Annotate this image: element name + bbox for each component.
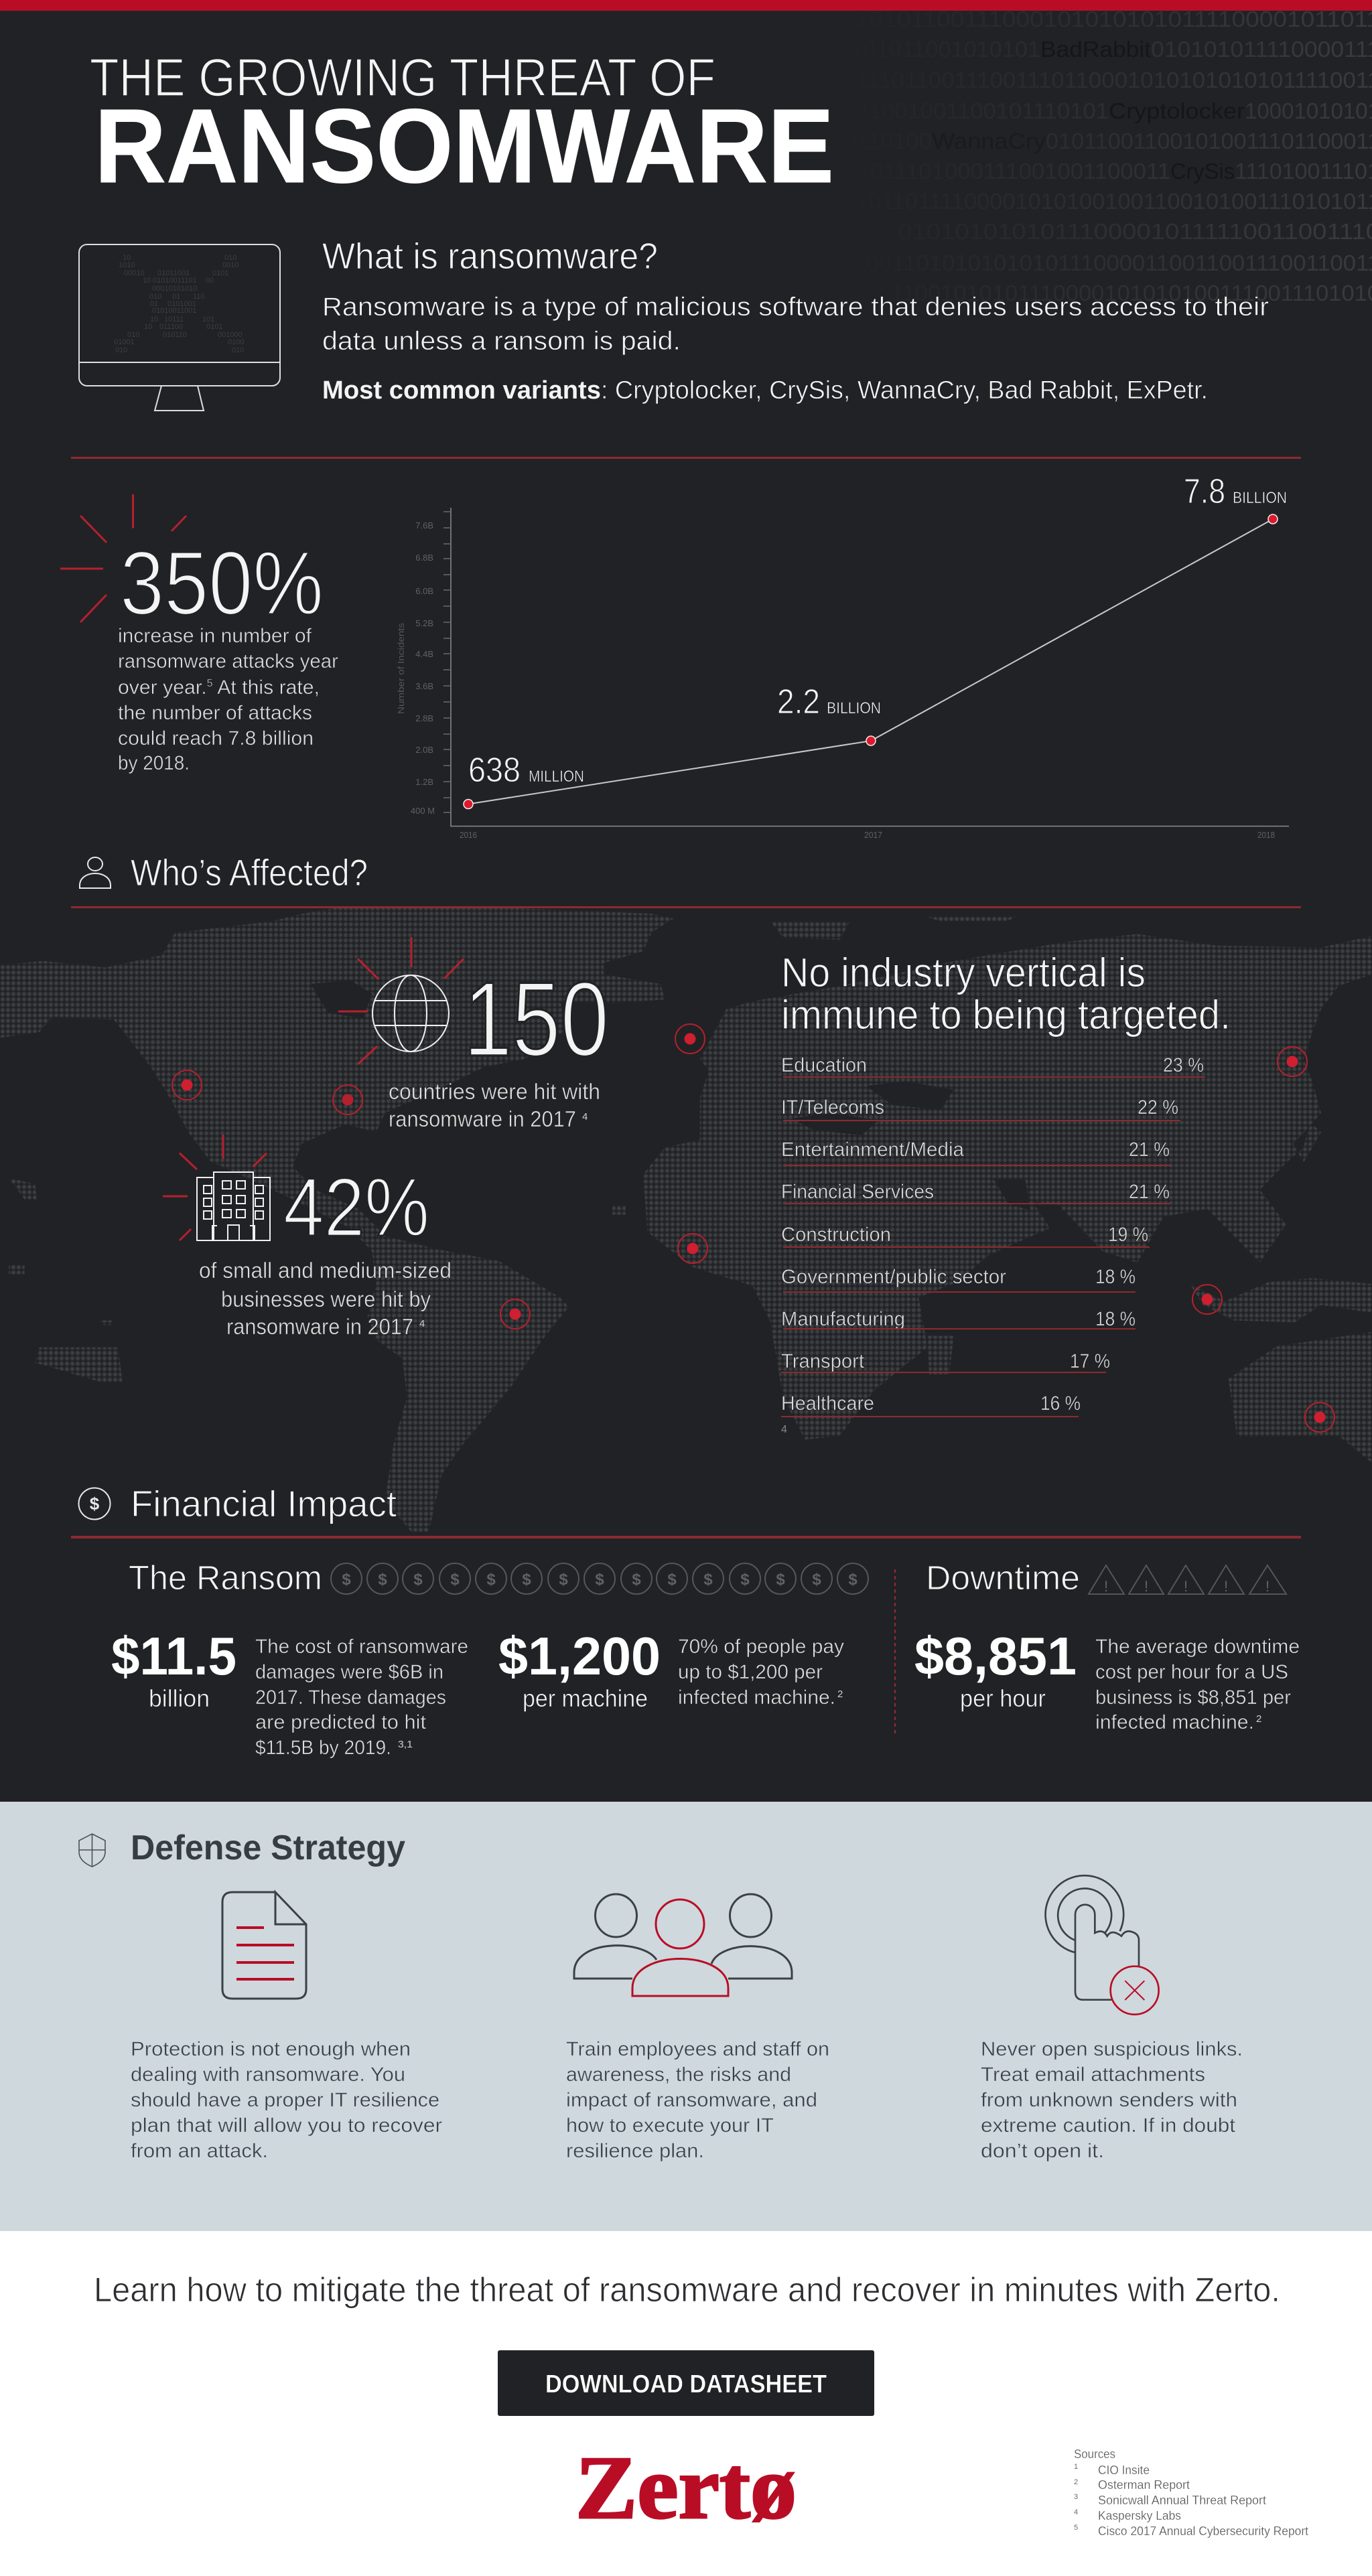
text: defense column three: don’t open it. (981, 2140, 1104, 2162)
stat: 350% increase with burst rays: over year. (118, 676, 206, 699)
title: THE GROWING THREAT OF (90, 48, 715, 107)
sources list: Cisco 2017 Annual Cybersecurity Report (1098, 2524, 1308, 2538)
icon: monitor with binary skull: 110 (193, 293, 205, 301)
icon: monitor with binary skull: 01 (172, 293, 180, 301)
industry percentage list (781, 1054, 1205, 1435)
stat: 42% businesses with building icon (163, 1135, 452, 1339)
binary code backdrop with ransomware variant names: 111001101101111000010101001001100101001110101011 (784, 189, 1372, 214)
line chart: number of incidents: 3.6B (415, 681, 433, 691)
stat: $1,200 per machine: 70% of people pay (678, 1636, 844, 1658)
line chart: number of incidents: 7.8 (1184, 472, 1225, 511)
industry percentage list: Healthcare (781, 1392, 874, 1415)
industry percentage list: Transport (781, 1350, 865, 1372)
intro text block: Most common variants (322, 376, 601, 405)
heading: financial impact: $ (90, 1494, 100, 1514)
dotted world map (0, 898, 1372, 1541)
icon: hand clicking link with red cross (1046, 1875, 1159, 2015)
subheading: downtime: Downtime (926, 1559, 1080, 1597)
icons: row of dollar coins: $ (559, 1571, 568, 1589)
intro text block: What is ransomware? (322, 235, 658, 277)
icons: row of dollar coins: $ (632, 1571, 641, 1589)
icons: row of warning triangles: ! (1265, 1578, 1270, 1595)
stat: 42% businesses with building icon: 4 (419, 1318, 425, 1330)
icon: document (222, 1892, 306, 1999)
stat: $1,200 per machine (498, 1626, 844, 1712)
stat: 150 countries with globe icon: 4 (582, 1111, 588, 1123)
industry percentage list: 23 % (1163, 1054, 1204, 1076)
industry percentage list: 4 (781, 1424, 787, 1435)
binary code backdrop with ransomware variant names: 010110011001010011101100011 (1046, 129, 1372, 153)
icons: row of dollar coins: $ (667, 1571, 677, 1589)
icon: monitor with binary skull: 10 (150, 315, 158, 324)
sources list: Sources (1074, 2447, 1115, 2461)
stat: $8,851 per hour: per hour (960, 1685, 1046, 1712)
sources list: 2 (1074, 2478, 1078, 2486)
stat: 150 countries with globe icon (338, 937, 609, 1131)
stat: $8,851 per hour (914, 1626, 1300, 1733)
industry percentage list: IT/Telecoms (781, 1096, 884, 1119)
icons: row of warning triangles: ! (1144, 1578, 1148, 1595)
binary code backdrop with ransomware variant names: BadRabbit (1040, 37, 1151, 62)
stat: $8,851 per hour: The average downtime (1095, 1636, 1300, 1658)
icon: monitor with binary skull: 0010 (222, 261, 238, 269)
line chart: number of incidents: BILLION (827, 699, 881, 717)
icons: row of dollar coins: $ (413, 1571, 423, 1589)
intro text block: Ransomware is a type of malicious software that denies users access to their (322, 293, 1269, 321)
industry percentage list: 16 % (1040, 1392, 1081, 1415)
sources list: 5 (1074, 2524, 1078, 2532)
line chart: number of incidents: MILLION (529, 768, 584, 786)
text: defense column two: how to execute your IT (566, 2115, 774, 2137)
industry percentage list: Government/public sector (781, 1266, 1006, 1288)
stat: 150 countries with globe icon: 150 (464, 960, 609, 1078)
sources list: 4 (1074, 2508, 1078, 2516)
industry percentage list: 21 % (1129, 1181, 1170, 1203)
binary code backdrop with ransomware variant names: Cryptolocker (1109, 98, 1245, 123)
icon: monitor with binary skull: 10 (123, 254, 131, 262)
line chart: number of incidents: 2.0B (415, 745, 433, 755)
icon: monitor with binary skull: 00010101010 (152, 285, 197, 293)
text: defense column two: impact of ransomware, and (566, 2089, 817, 2111)
binary code backdrop with ransomware variant names: 01010101010111000010111110011001110 (898, 219, 1372, 244)
button: download datasheet (498, 2350, 874, 2416)
binary code backdrop with ransomware variant names: 1110101011001110001010101010111100001011011 (804, 7, 1372, 31)
text: defense column one: from an attack. (131, 2140, 268, 2162)
line chart: number of incidents: Number of Incidents (396, 622, 406, 714)
stat: $11.5 billion: are predicted to hit (255, 1711, 427, 1733)
stat: $11.5 billion (111, 1626, 468, 1759)
heading: no industry vertical: No industry vertical is (781, 950, 1146, 995)
sources list: Kaspersky Labs (1098, 2509, 1181, 2522)
stat: $11.5 billion: 2017. These damages (255, 1687, 446, 1709)
icon: monitor with binary skull: 010 (115, 346, 127, 354)
industry percentage list: 19 % (1108, 1224, 1148, 1246)
stat: $11.5 billion: billion (149, 1685, 210, 1712)
text: defense column one: should have a proper IT resilience (131, 2089, 439, 2111)
stat: $11.5 billion: damages were $6B in (255, 1661, 443, 1683)
stat: $1,200 per machine: per machine (523, 1685, 648, 1712)
icon: monitor with binary skull: 010 (149, 293, 161, 301)
intro text block: data unless a ransom is paid. (322, 327, 681, 356)
logo: Zerto: Zertø (575, 2438, 797, 2537)
icons: row of dollar coins (331, 1563, 868, 1594)
panel: defense strategy (0, 1802, 1372, 2231)
stat: $1,200 per machine: $1,200 (498, 1626, 661, 1686)
heading: who's affected: Who’s Affected? (131, 851, 368, 893)
heading: financial impact: Financial Impact (131, 1483, 397, 1524)
icon: monitor with binary skull: 010110 (163, 331, 187, 339)
line chart: number of incidents: BILLION (1233, 489, 1287, 507)
text: defense column one: dealing with ransomware. You (131, 2064, 405, 2086)
icon: monitor with binary skull: 01010011101 (153, 277, 197, 285)
sources list: CIO Insite (1098, 2463, 1150, 2477)
icons: row of warning triangles: ! (1104, 1578, 1108, 1595)
industry percentage list: 17 % (1070, 1350, 1110, 1372)
text: defense column three (981, 2038, 1243, 2162)
title: RANSOMWARE (94, 88, 834, 205)
industry percentage list: 21 % (1129, 1139, 1170, 1161)
icon: monitor with binary skull (79, 244, 280, 411)
text: defense column two: resilience plan. (566, 2140, 704, 2162)
line chart: number of incidents: 400 M (411, 806, 435, 816)
icon: monitor with binary skull: 0100 (228, 338, 244, 346)
intro text block: : Cryptolocker, CrySis, WannaCry, Bad Rabbit, ExPetr. (601, 376, 1208, 405)
icons: row of dollar coins: $ (342, 1571, 351, 1589)
binary code backdrop with ransomware variant names: 010101011110000111 (1151, 37, 1372, 62)
stat: $1,200 per machine: up to $1,200 per (678, 1661, 823, 1683)
text: defense column three: Treat email attachments (981, 2064, 1205, 2086)
icon: monitor with binary skull: 0101 (206, 323, 222, 331)
stat: $11.5 billion: $11.5B by 2019. (255, 1737, 391, 1759)
stat: $8,851 per hour: 2 (1256, 1713, 1261, 1725)
stat: $11.5 billion: The cost of ransomware (255, 1636, 468, 1658)
sources list: 3 (1074, 2493, 1078, 2501)
subheading: the ransom: The Ransom (129, 1559, 322, 1597)
icons: row of dollar coins: $ (378, 1571, 387, 1589)
stat: 350% increase with burst rays: ransomware attacks year (118, 650, 338, 672)
line chart: number of incidents: 2017 (864, 830, 882, 840)
icon: monitor with binary skull: 01001 (114, 338, 135, 346)
sources list: Osterman Report (1098, 2478, 1190, 2492)
heading: defense strategy: Defense Strategy (131, 1829, 405, 1867)
sources list: Sonicwall Annual Threat Report (1098, 2494, 1266, 2507)
stat: $8,851 per hour: infected machine. (1095, 1711, 1254, 1733)
icons: row of warning triangles: ! (1224, 1578, 1228, 1595)
binary code backdrop with ransomware variant names: 0100111011001110011101100010101010101011110011 (804, 68, 1372, 92)
icon: monitor with binary skull: 10111 (164, 315, 184, 324)
stat: 42% businesses with building icon: businesses were hit by (221, 1287, 431, 1311)
line chart: number of incidents: 2018 (1257, 830, 1275, 840)
icon: monitor with binary skull: 0101 (212, 269, 228, 277)
line chart: number of incidents (396, 472, 1289, 840)
icons: row of dollar coins: $ (522, 1571, 531, 1589)
icons: row of dollar coins: $ (450, 1571, 460, 1589)
text: defense column two: Train employees and staff on (566, 2038, 829, 2060)
binary code backdrop with ransomware variant names: 110101011001010101 (814, 37, 1040, 62)
binary code backdrop with ransomware variant names: 11001001100101110101 (858, 98, 1109, 123)
binary code backdrop with ransomware variant names: 10110100110101010101011100001100110011100110011 (791, 251, 1372, 275)
stat: $8,851 per hour: $8,851 (914, 1626, 1077, 1686)
binary code backdrop with ransomware variant names: 1011101000111001001100011 (858, 159, 1170, 184)
stat: $1,200 per machine: infected machine. (678, 1687, 835, 1709)
stat: $11.5 billion: $11.5 (111, 1626, 236, 1686)
sources list: 1 (1074, 2463, 1078, 2471)
stat: 42% businesses with building icon: 42% (283, 1162, 429, 1254)
line chart: number of incidents: 2016 (460, 830, 477, 840)
industry percentage list: Financial Services (781, 1181, 934, 1203)
top red bar (0, 0, 1372, 11)
icons: row of warning triangles: ! (1184, 1578, 1188, 1595)
stat: 350% increase with burst rays: 350% (120, 532, 324, 634)
industry percentage list: Education (781, 1054, 867, 1076)
icon: monitor with binary skull: 011100 (159, 323, 183, 331)
panel: white footer (0, 2231, 1372, 2576)
text: defense column two (566, 2038, 829, 2162)
icons: row of dollar coins: $ (703, 1571, 713, 1589)
line chart: number of incidents: 5.2B (415, 618, 433, 628)
text: defense column three: from unknown senders with (981, 2089, 1237, 2111)
icon: monitor with binary skull: 101 (202, 315, 214, 324)
industry percentage list: Manufacturing (781, 1308, 905, 1330)
line chart: number of incidents: 638 (468, 751, 521, 790)
stat: 350% increase with burst rays: by 2018. (118, 752, 190, 774)
industry percentage list: Construction (781, 1224, 891, 1246)
icon: monitor with binary skull: 10 (143, 277, 151, 285)
industry percentage list: 18 % (1095, 1308, 1136, 1330)
industry percentage list: 18 % (1095, 1266, 1136, 1288)
stat: $8,851 per hour: business is $8,851 per (1095, 1687, 1291, 1709)
stat: 150 countries with globe icon: ransomware in 2017 (389, 1106, 576, 1131)
button: download datasheet: DOWNLOAD DATASHEET (545, 2370, 827, 2399)
stat: 42% businesses with building icon: ransomware in 2017 (226, 1314, 413, 1339)
text: defense column three: extreme caution. If in doubt (981, 2115, 1236, 2137)
industry percentage list: 22 % (1138, 1096, 1178, 1119)
text: defense column one: Protection is not enough when (131, 2038, 411, 2060)
heading: no industry vertical (781, 950, 1231, 1037)
stat: 350% increase with burst rays: At this rate, (213, 676, 320, 699)
stat: 350% increase with burst rays: increase in number of (118, 625, 312, 647)
icon: monitor with binary skull: 00 (206, 277, 214, 285)
icons: row of dollar coins: $ (812, 1571, 821, 1589)
icon: three people (574, 1894, 792, 1996)
icon: monitor with binary skull: 010 (224, 254, 236, 262)
icons: row of warning triangles (1089, 1565, 1286, 1595)
line chart: number of incidents: 2.2 (777, 683, 820, 721)
icon: monitor with binary skull: 010 (232, 346, 244, 354)
call to action text: Learn how to mitigate the threat of ransomware and recover in minutes with Zerto. (94, 2271, 1280, 2309)
stat: $8,851 per hour: cost per hour for a US (1095, 1661, 1288, 1683)
binary code backdrop with ransomware variant names: 110010101011100001010101001110011101010 (891, 281, 1372, 305)
stat: 350% increase with burst rays: the number of attacks (118, 702, 312, 724)
heading: no industry vertical: immune to being targeted. (781, 992, 1231, 1037)
icon: monitor with binary skull: 1010 (119, 261, 135, 269)
icon: monitor with binary skull: 0101001 (167, 300, 196, 308)
icon: monitor with binary skull: 00010 (124, 269, 145, 277)
icon: monitor with binary skull: 01 (150, 300, 158, 308)
industry percentage list: Entertainment/Media (781, 1139, 964, 1161)
stat: $1,200 per machine: 2 (837, 1689, 843, 1700)
stat: 150 countries with globe icon: countries were hit with (389, 1079, 600, 1104)
icon: monitor with binary skull: 01010011001 (152, 307, 196, 315)
icon: monitor with binary skull: 001000 (218, 331, 243, 339)
text: defense column two: awareness, the risks and (566, 2064, 791, 2086)
stat: 350% increase with burst rays: 5 (207, 678, 213, 689)
text: defense column three: Never open suspicious links. (981, 2038, 1243, 2060)
dark background panel (0, 0, 1372, 1802)
line chart: number of incidents: 1.2B (415, 777, 433, 787)
icon: monitor with binary skull: 01011001 (157, 269, 190, 277)
sources list (1074, 2447, 1308, 2538)
intro text block (322, 235, 1269, 405)
binary code backdrop with ransomware variant names: WannaCry (932, 129, 1046, 153)
icon: monitor with binary skull: 010 (127, 331, 139, 339)
binary code backdrop with ransomware variant names: 111010011101 (1235, 159, 1372, 184)
line chart: number of incidents: 6.0B (415, 586, 433, 596)
icon: monitor with binary skull: 10 (144, 323, 152, 331)
icons: row of dollar coins: $ (848, 1571, 858, 1589)
line chart: number of incidents: 6.8B (415, 553, 433, 563)
text: defense column one (131, 2038, 442, 2162)
icons: row of dollar coins: $ (740, 1571, 750, 1589)
line chart: number of incidents: 2.8B (415, 713, 433, 723)
line chart: number of incidents: 4.4B (415, 649, 433, 659)
stat: $11.5 billion: 3,1 (398, 1739, 413, 1750)
icons: row of dollar coins: $ (486, 1571, 496, 1589)
binary code backdrop with ransomware variant names (784, 7, 1372, 305)
stat: 42% businesses with building icon: of small and medium-sized (199, 1258, 452, 1283)
icons: row of dollar coins: $ (595, 1571, 604, 1589)
binary code backdrop with ransomware variant names: 10110100 (831, 129, 932, 153)
binary code backdrop with ransomware variant names: CrySis (1170, 159, 1235, 184)
icons: row of dollar coins: $ (776, 1571, 785, 1589)
stat: 350% increase with burst rays (60, 494, 338, 774)
map markers (172, 1024, 1334, 1432)
line chart: number of incidents: 7.6B (415, 520, 433, 530)
stat: 350% increase with burst rays: could reach 7.8 billion (118, 727, 314, 749)
text: defense column one: plan that will allow you to recover (131, 2115, 442, 2137)
